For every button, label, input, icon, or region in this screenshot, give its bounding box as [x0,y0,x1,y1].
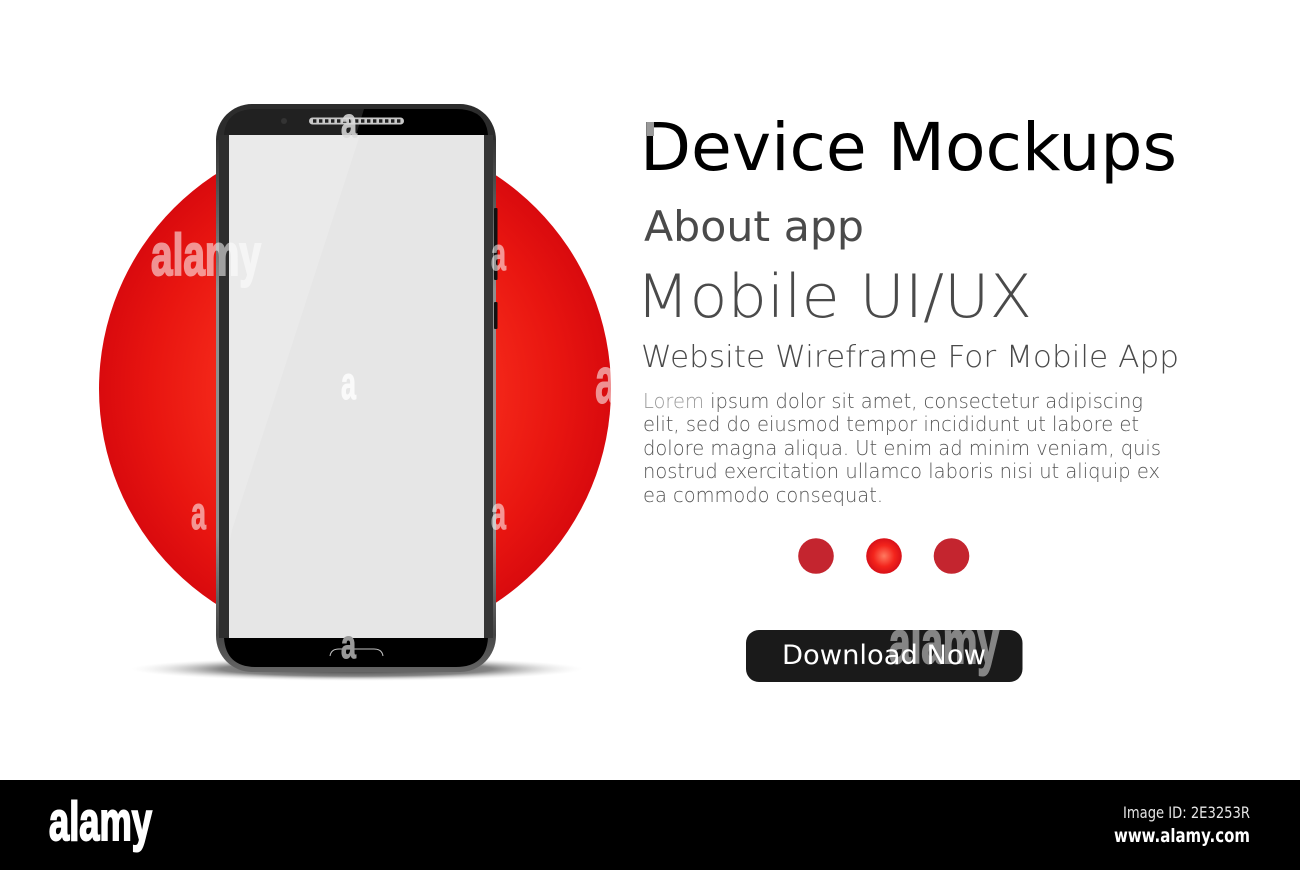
body paragraph: elit, sed do eiusmod tempor incididunt ut labore et [643,412,1139,436]
red circle backdrop [99,133,611,645]
subheading: Website Wireframe For Mobile App [641,340,1179,375]
speaker grille [309,118,404,124]
watermark letters over phone: a [595,343,617,417]
body paragraph [643,389,1161,507]
front camera [281,118,287,124]
download button [746,630,1022,682]
watermark letters over phone: alamy [151,223,261,288]
body paragraph: dolore magna aliqua. Ut enim ad minim veniam, quis [643,436,1161,460]
watermark letters over phone: a [341,623,357,667]
watermark letters over phone: a [341,357,356,409]
image id: Image ID: 2E3253R [1123,803,1250,822]
watermark fade over Lorem [643,391,703,410]
phone body [216,104,496,672]
watermark letters over phone: a [341,99,357,146]
heading: mobile ui/ux: Mobile UI/UX [636,262,1032,332]
side buttons [494,208,498,329]
phone inner front [224,109,488,667]
watermark letters over phone: a [491,228,506,280]
watermark letters over phone: a [191,487,206,539]
side bezels [216,135,496,638]
screen [229,135,484,638]
watermark patch on title D [647,122,654,136]
button label: Download Now [782,640,986,671]
body paragraph: ea commodo consequat. [643,483,883,507]
watermark letters over phone: a [491,487,506,539]
phone mockup [216,104,498,672]
title: Device Mockups [640,109,1177,186]
watermark letters over phone [151,99,617,667]
home button [330,649,383,656]
body paragraph: nostrud exercitation ullamco laboris nisi ut aliquip ex [643,459,1160,483]
pagination dots [798,538,969,574]
heading: about app: About app [644,202,864,251]
website: www.alamy.com [1114,825,1250,847]
screen reflection [229,135,360,545]
glass reflection on top bezel [224,109,364,135]
footer bar [0,780,1300,870]
body paragraph: Lorem ipsum dolor sit amet, consectetur adipiscing [643,389,1143,413]
footer logo: alamy [49,790,152,852]
button watermark: alamy [889,609,999,676]
phone shadow [131,657,583,681]
